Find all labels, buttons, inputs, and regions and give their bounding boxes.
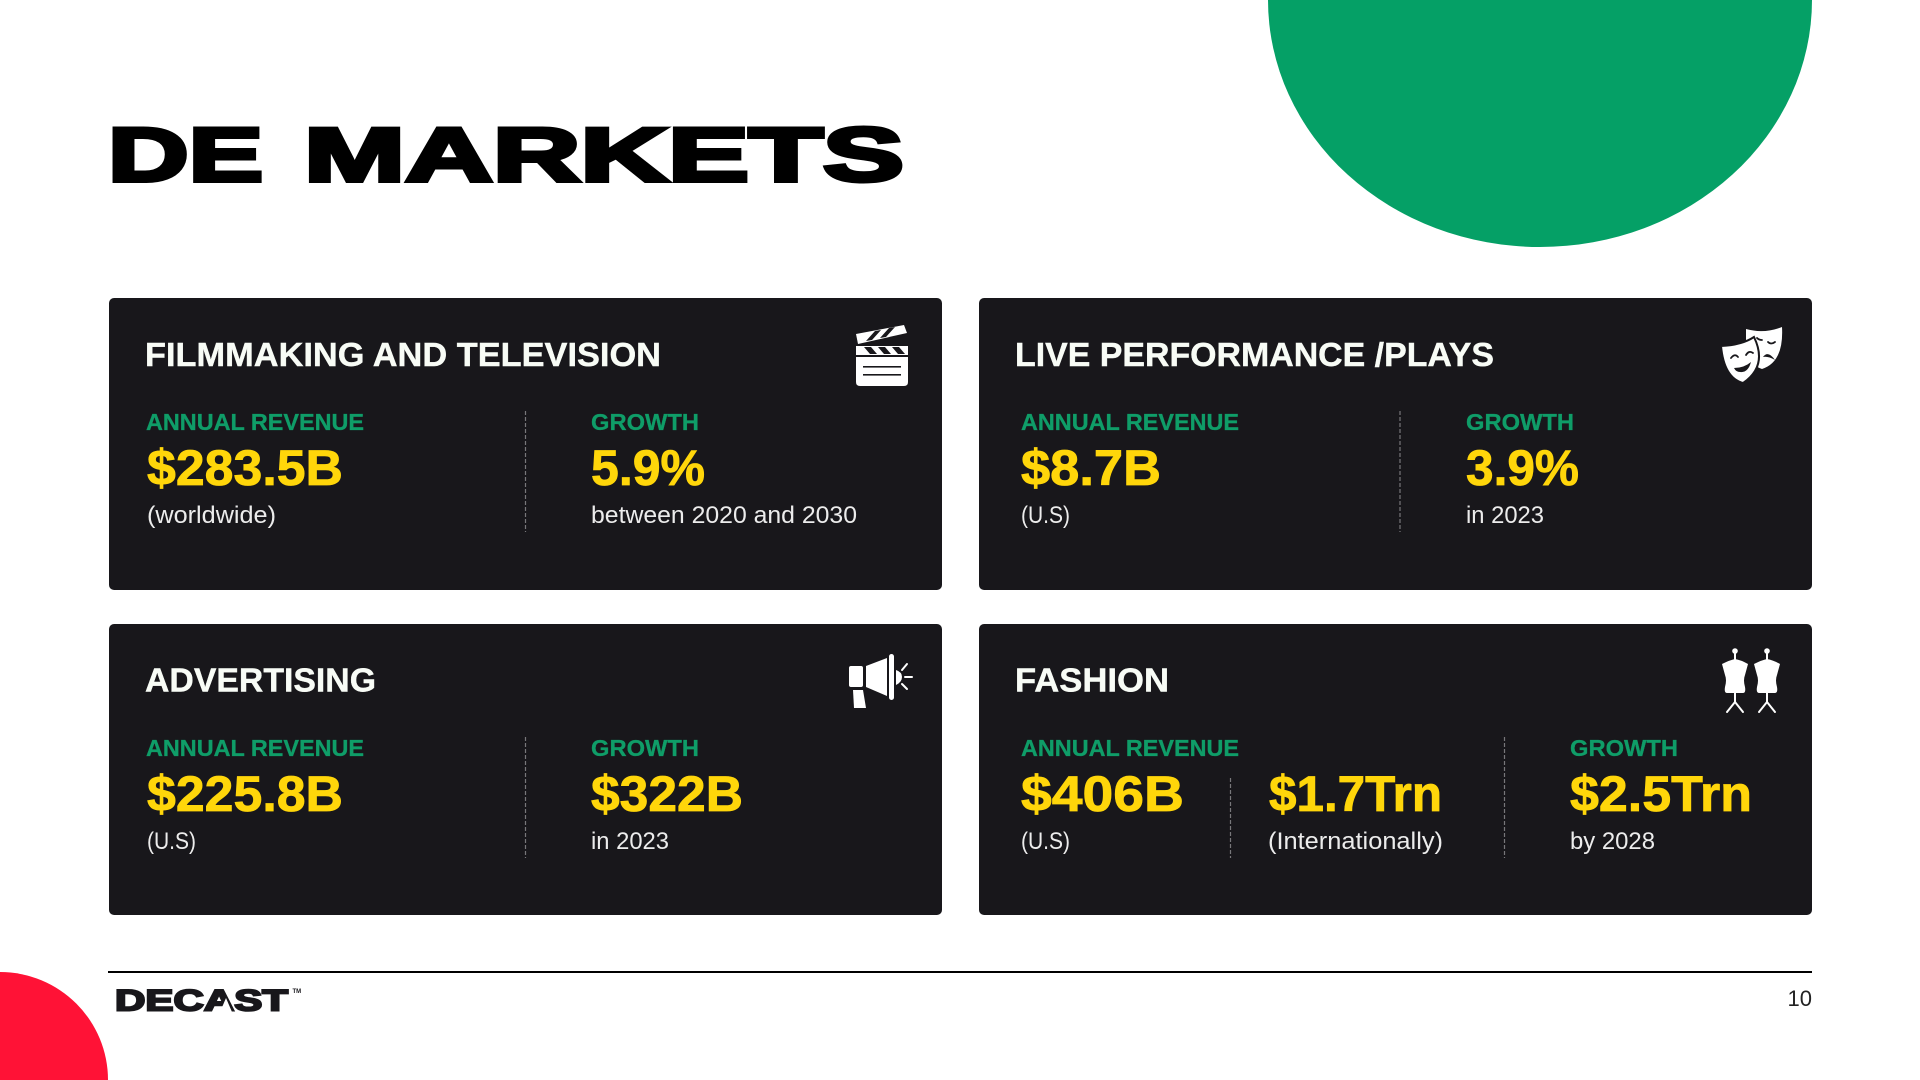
page number: 10 (1788, 986, 1812, 1011)
stat: annual revenue: ANNUAL REVENUE (1021, 735, 1239, 761)
stat: international revenue: $1.7Trn (1269, 766, 1442, 822)
stat: annual revenue (1021, 409, 1239, 529)
stat: annual revenue: $225.8B (147, 766, 343, 822)
stat: growth (1570, 735, 1752, 855)
footer logo (115, 984, 301, 1018)
footer logo: DECAST (115, 984, 288, 1018)
title: MARKETS (304, 113, 904, 198)
stat: growth: in 2023 (591, 828, 669, 855)
green semicircle decoration (1268, 0, 1812, 247)
title: DE (108, 113, 263, 198)
panel heading: fashion: FASHION (1015, 662, 1169, 698)
stat: growth: GROWTH (1466, 409, 1574, 435)
icon: megaphone (849, 654, 912, 708)
stat: annual revenue: $406B (1021, 766, 1184, 822)
stat: growth: between 2020 and 2030 (591, 502, 857, 529)
panel heading: live performance: LIVE PERFORMANCE /PLAYS (1015, 336, 1494, 373)
stat: annual revenue: ANNUAL REVENUE (1021, 409, 1239, 435)
footer logo: TM (292, 989, 301, 995)
icon: clapperboard (856, 325, 908, 386)
stat: annual revenue: (U.S) (1021, 828, 1070, 855)
icon: theatre masks (1721, 327, 1782, 383)
stat: annual revenue: (worldwide) (147, 502, 276, 529)
stat: annual revenue: ANNUAL REVENUE (146, 735, 364, 761)
stat: international revenue (1268, 766, 1443, 855)
panel: filmmaking and television (109, 298, 942, 590)
stat: annual revenue (146, 735, 364, 855)
stat: growth (1466, 409, 1579, 529)
stat: annual revenue: $283.5B (147, 440, 343, 496)
red corner circle decoration (0, 972, 108, 1080)
stat: annual revenue: $8.7B (1021, 440, 1161, 496)
stat: annual revenue (146, 409, 364, 529)
stat: growth: $322B (591, 766, 743, 822)
stat: growth (591, 735, 743, 855)
icon: dress forms (1722, 648, 1780, 712)
stat: annual revenue: ANNUAL REVENUE (146, 409, 364, 435)
stat: annual revenue: (U.S) (147, 828, 196, 855)
stat: growth: GROWTH (591, 735, 699, 761)
panel heading: filmmaking: FILMMAKING AND TELEVISION (145, 336, 661, 373)
stat: growth: GROWTH (591, 409, 699, 435)
stat: annual revenue (1021, 735, 1239, 855)
stat: growth: in 2023 (1466, 502, 1544, 529)
stat: growth: 5.9% (591, 440, 705, 496)
panel heading: advertising: ADVERTISING (145, 662, 376, 698)
stat: annual revenue: (U.S) (1021, 502, 1070, 529)
stat: growth: GROWTH (1570, 735, 1678, 761)
title (108, 113, 904, 198)
stat: growth: 3.9% (1466, 440, 1579, 496)
panel: fashion (979, 624, 1812, 915)
panel: advertising (109, 624, 942, 915)
stat: growth (591, 409, 857, 529)
stat: international revenue: (Internationally) (1268, 828, 1443, 855)
stat: growth: $2.5Trn (1570, 766, 1752, 822)
panel: live performance / plays (979, 298, 1812, 590)
stat: growth: by 2028 (1570, 828, 1655, 855)
